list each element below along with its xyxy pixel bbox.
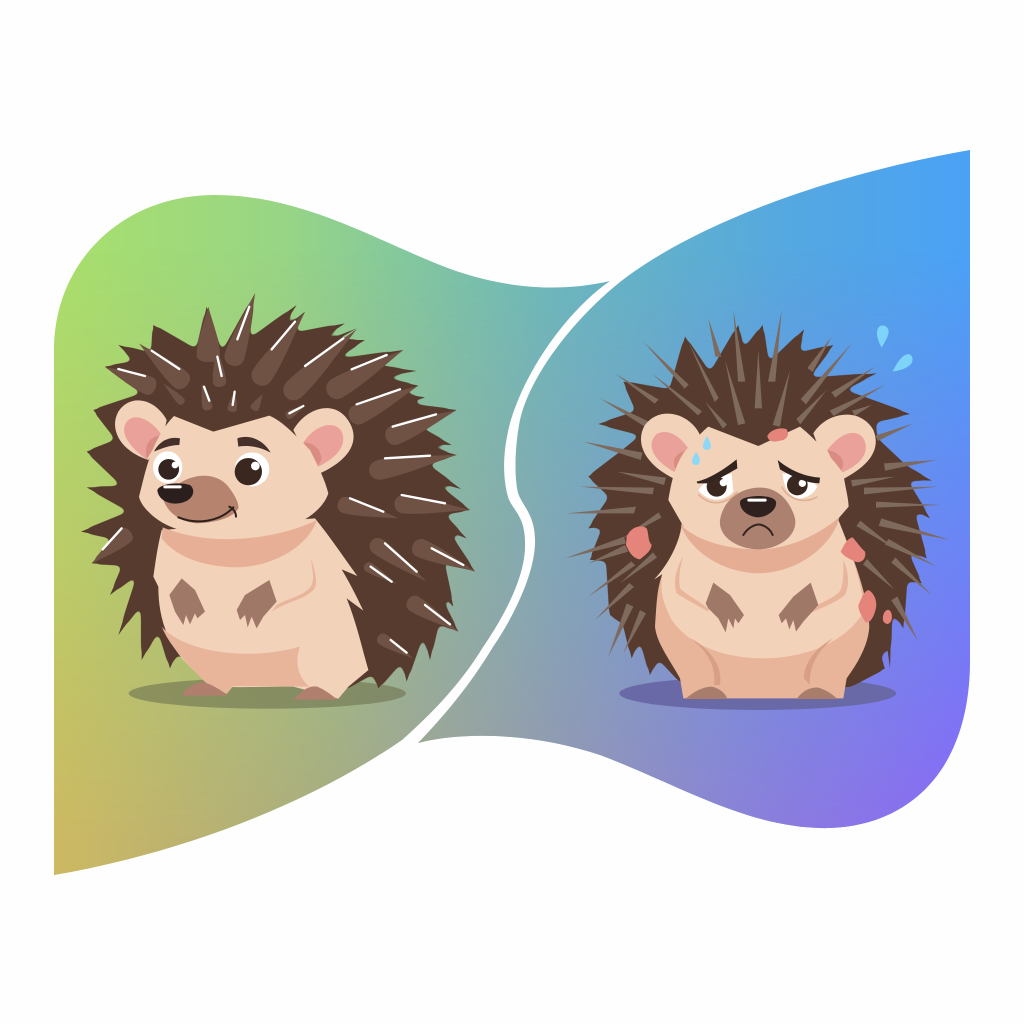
light spines (87, 290, 479, 664)
hind leg (298, 613, 368, 699)
leg creases (691, 638, 833, 685)
body (153, 518, 368, 699)
feet (182, 683, 337, 700)
arm creases (675, 556, 848, 613)
right eye (235, 452, 269, 486)
nose (157, 483, 193, 504)
paws (169, 578, 277, 628)
left ear (115, 400, 167, 460)
frown (743, 525, 773, 535)
belly (654, 520, 863, 658)
lower belly shade (162, 627, 310, 694)
muzzle (163, 476, 238, 523)
right ear (813, 415, 876, 481)
neck shade (162, 520, 317, 567)
ground shadow (129, 678, 406, 709)
neck shade (681, 517, 839, 573)
forehead sweat drops (692, 436, 711, 465)
eyebrows (154, 437, 271, 453)
muzzle (720, 488, 795, 549)
spine highlights (103, 307, 463, 653)
thin broken spines (565, 310, 950, 657)
nose (740, 496, 776, 517)
head (139, 416, 328, 538)
ground shadow (619, 677, 896, 710)
smile (178, 507, 236, 521)
right hedgehog: stressed and hurt (565, 310, 950, 710)
illustration: two hedgehogs on a split gradient wave (54, 150, 970, 875)
paws (706, 583, 818, 632)
feet (685, 687, 837, 699)
left eye (153, 451, 182, 483)
floating sweat drops (877, 326, 913, 372)
background wave panels with gradient (54, 150, 970, 875)
left ear (641, 414, 700, 478)
right sad eye (778, 460, 820, 500)
head (668, 427, 849, 548)
right ear (293, 408, 354, 474)
arm crease (272, 558, 316, 612)
bruises (626, 428, 892, 624)
left sad eye (697, 459, 737, 503)
dark spine mass (81, 293, 475, 688)
left hedgehog: healthy and happy (81, 290, 479, 709)
body (654, 520, 869, 698)
dark spine mass (588, 325, 932, 687)
